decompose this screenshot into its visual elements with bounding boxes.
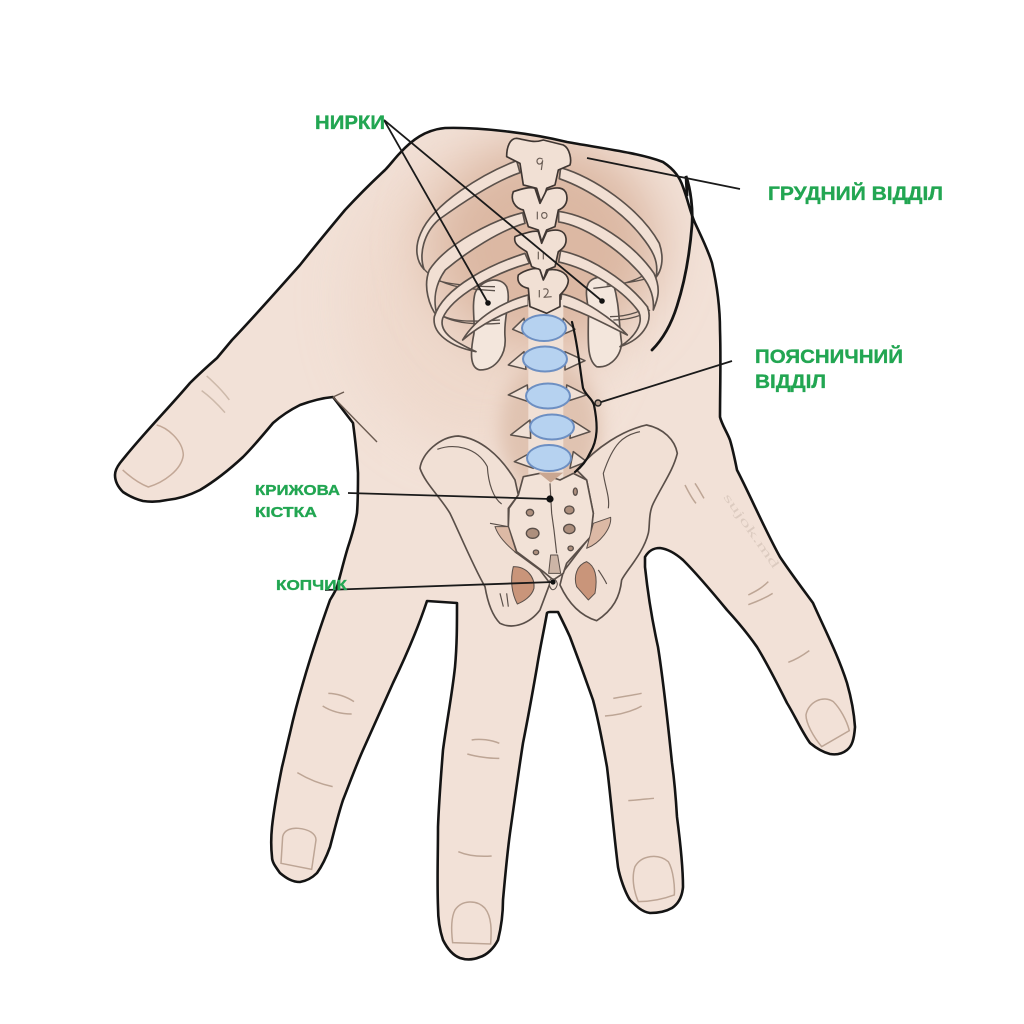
index finger details (281, 693, 354, 869)
sacrum apex (538, 473, 563, 483)
vertebra numbers (537, 158, 552, 297)
middle finger details (452, 739, 499, 944)
rear rib arcs (420, 263, 653, 324)
lumbar body (528, 300, 563, 487)
vertebra 10 (512, 188, 567, 242)
intervertebral discs (522, 315, 574, 471)
left ribs (417, 161, 529, 352)
thoracic pointer (587, 158, 740, 189)
sciatic notches (495, 527, 517, 553)
hand (90, 110, 880, 980)
vertebra 11 (515, 230, 566, 280)
right ribs (559, 168, 662, 347)
transverse processes (508, 318, 590, 468)
lumbar pointer (598, 361, 732, 403)
label: lumbar: ПОЯСНИЧНИЙ (755, 346, 903, 368)
kidney pointer right (384, 120, 602, 301)
watermark on pinky: sujok.md (721, 491, 782, 571)
finger nails and creases (281, 693, 674, 944)
pelvis (420, 425, 677, 626)
vertebra 12 (518, 269, 568, 313)
label: thoracic: ГРУДНИЙ ВІДДІЛ (768, 183, 943, 205)
lumbar bracket (572, 322, 597, 472)
hand outline (115, 128, 855, 959)
coccyx (549, 555, 561, 573)
sacrum (508, 473, 593, 580)
thoracic bracket (652, 176, 692, 350)
thoracic section with ribs and kidneys (417, 161, 662, 370)
ring finger details (605, 693, 674, 902)
right ilium (560, 425, 677, 621)
obturator foramina (512, 567, 534, 604)
left kidney (471, 280, 508, 370)
coccyx pointer (325, 582, 553, 590)
pointer lines (325, 120, 740, 590)
sacrum midline and pelvis inner lines (437, 432, 640, 607)
label: lumbar second line: ВІДДІЛ (755, 372, 826, 393)
sacral foramina (526, 488, 577, 555)
label: sacrum second line: КІСТКА (255, 504, 317, 521)
kidney pointer left (384, 120, 488, 303)
thumb web crease (333, 392, 377, 442)
pointer end dots (485, 298, 605, 585)
right kidney (586, 277, 622, 367)
left ilium (420, 436, 550, 626)
infographic: spine projection on hand (114, 115, 942, 961)
label: coccyx: КОПЧИК (276, 577, 348, 594)
thumb nail and creases (123, 376, 229, 487)
sacrum pointer (348, 493, 550, 499)
lumbar spine column (508, 300, 590, 487)
label: sacrum: КРИЖОВА (255, 482, 340, 499)
label: kidneys: НИРКИ (315, 113, 385, 134)
vertebra 9 (507, 138, 571, 205)
pinky nail and creases (685, 483, 849, 747)
hand fill and shading (116, 129, 854, 958)
thoracic vertebrae (507, 138, 571, 313)
